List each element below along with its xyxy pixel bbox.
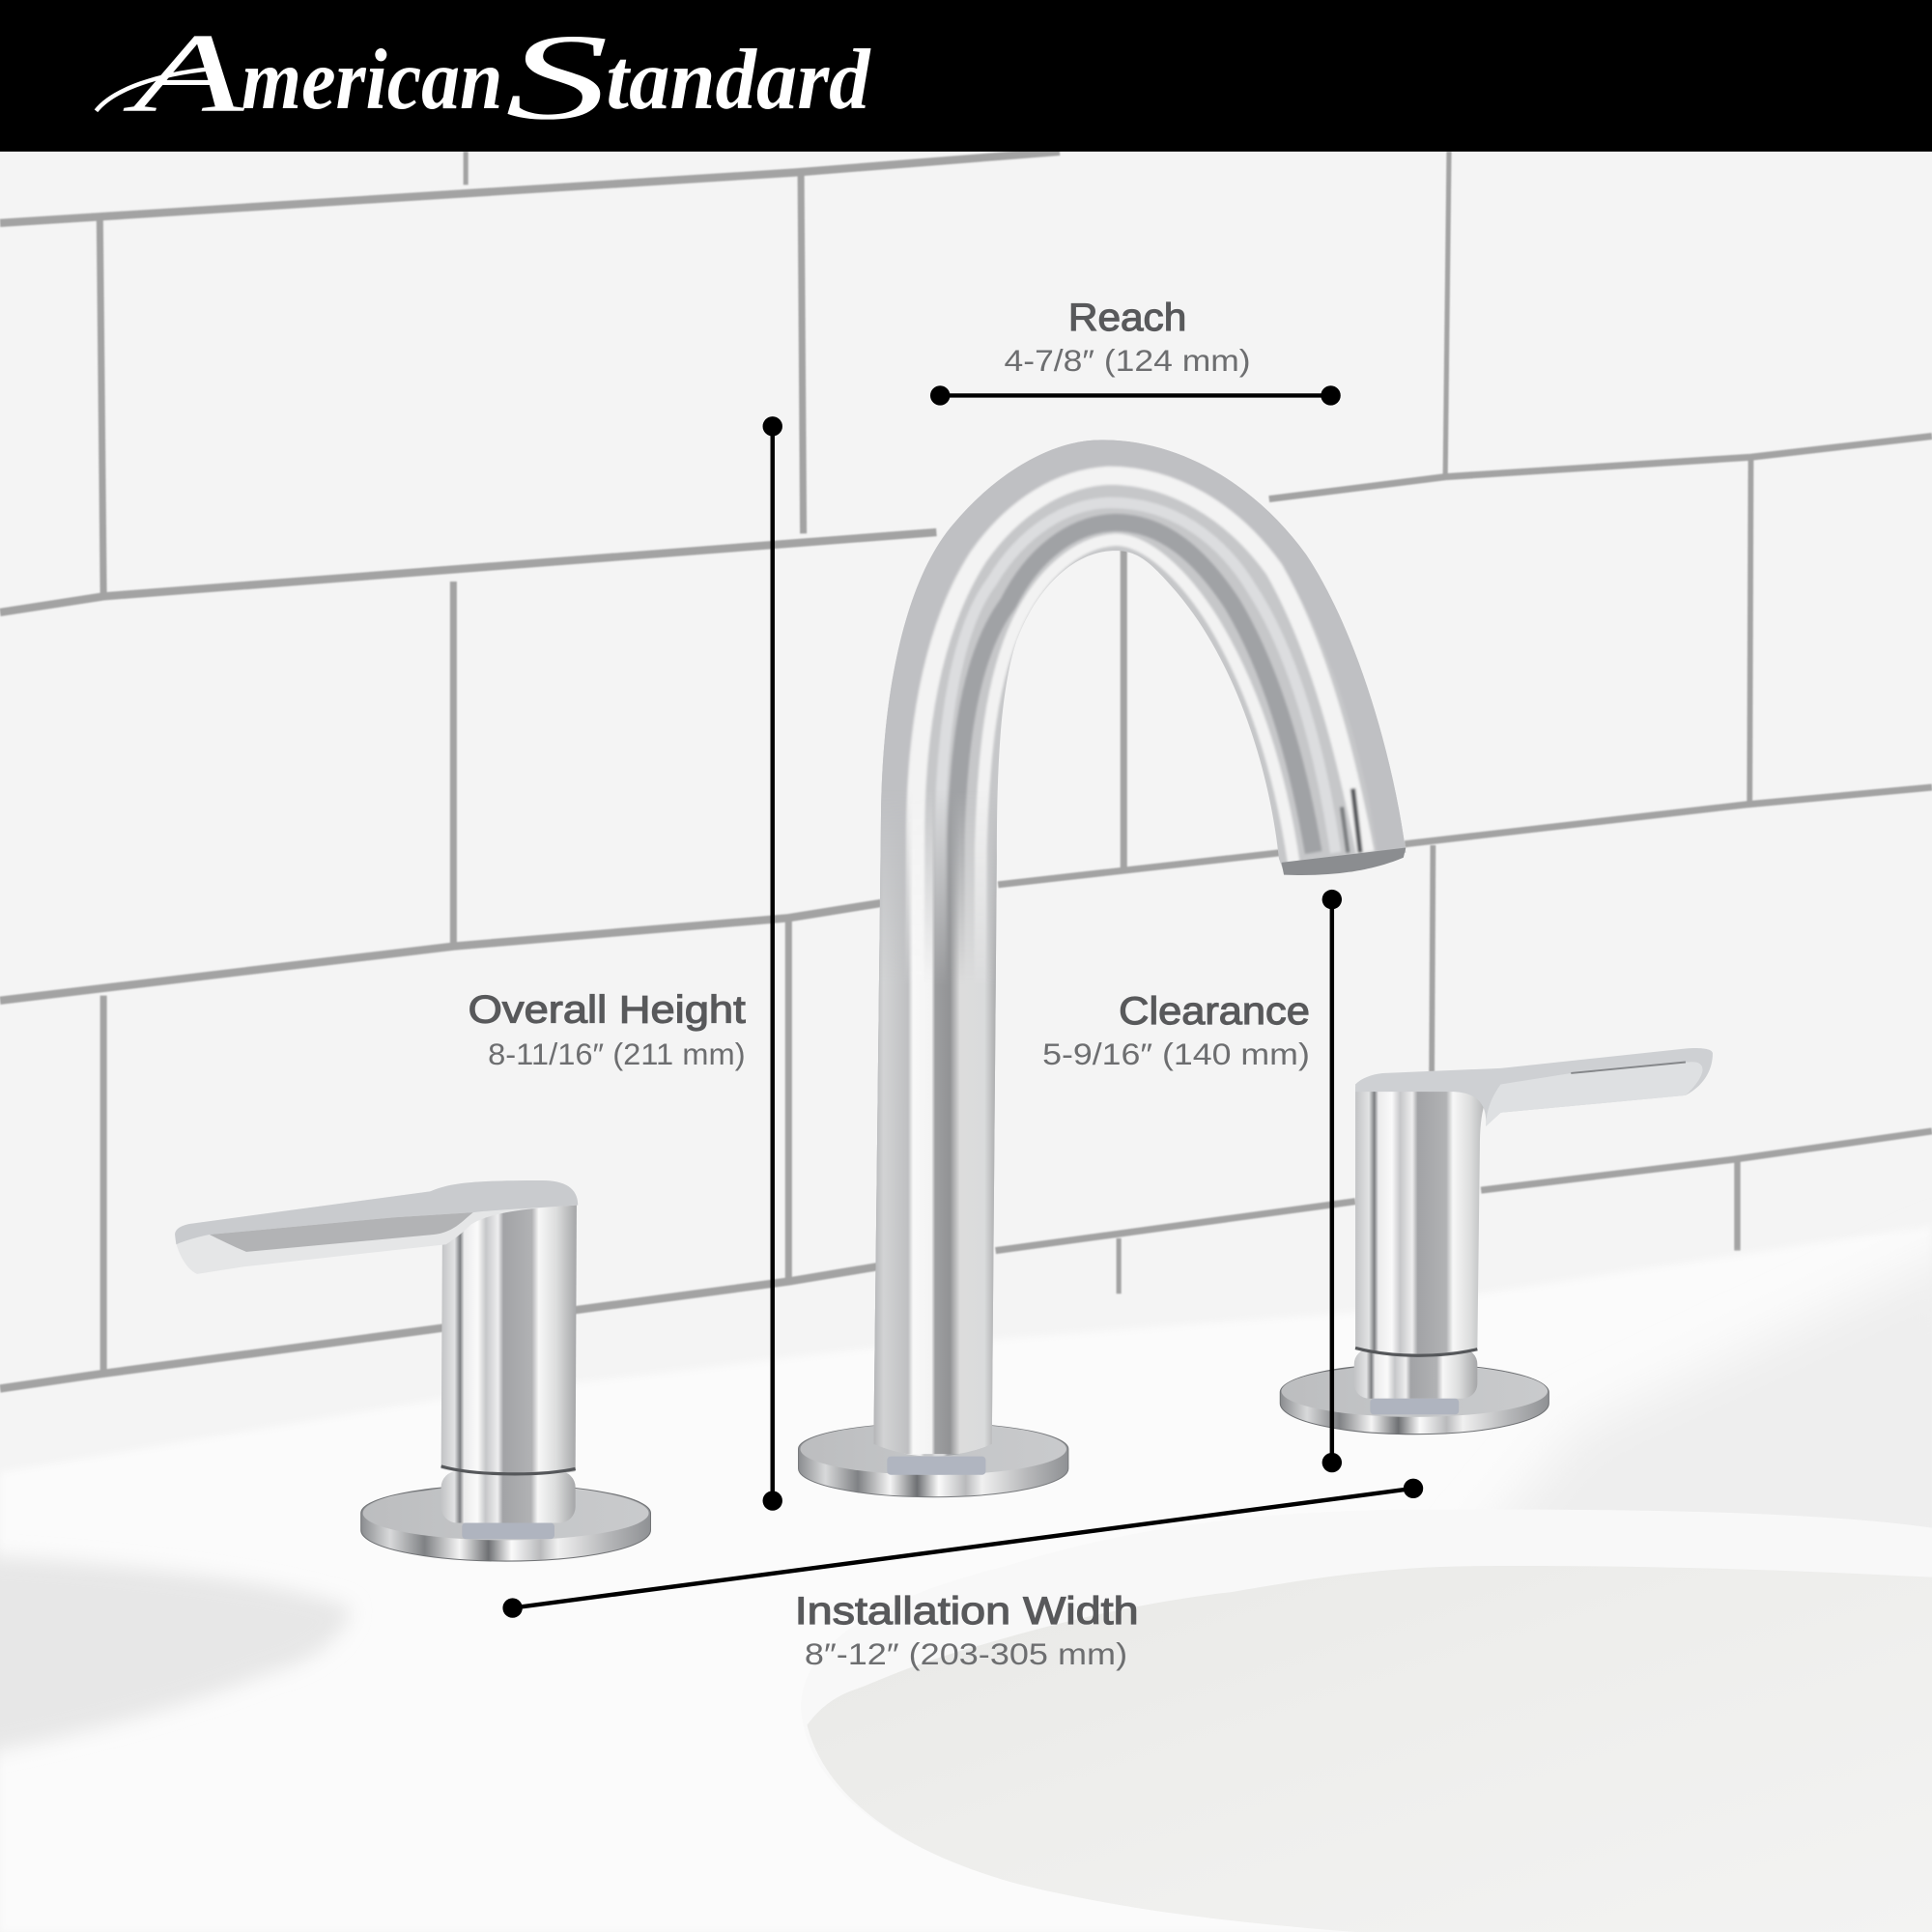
logo: American Standard: S	[505, 8, 609, 145]
label: installation width	[795, 1590, 1139, 1671]
label: overall height	[469, 989, 746, 1071]
spout stem stripes	[873, 788, 997, 1454]
dimension line: overall height	[763, 416, 782, 1511]
dimension line: reach	[930, 385, 1341, 406]
logo: American Standard	[96, 8, 871, 145]
label: clearance: 5-9/16″ (140 mm)	[1042, 1037, 1310, 1071]
faucet spout	[873, 440, 1406, 1466]
label: reach: Reach	[1068, 297, 1186, 339]
label: reach	[1005, 297, 1251, 378]
label: reach: 4-7/8″ (124 mm)	[1005, 343, 1251, 378]
label: installation width: Installation Width	[795, 1590, 1139, 1633]
left sink basin	[0, 1555, 352, 1757]
dimension line: installation width	[502, 1479, 1423, 1618]
center plate reflection	[887, 1457, 985, 1475]
right handle	[1280, 1048, 1713, 1435]
label: clearance: Clearance	[1119, 990, 1310, 1033]
tile grout lines	[0, 152, 1932, 1389]
logo: American Standard: A	[123, 11, 246, 136]
label: clearance	[1042, 990, 1310, 1071]
dimension line: clearance	[1322, 890, 1342, 1472]
counter shading right	[1454, 1244, 1932, 1577]
label: overall height: 8-11/16″ (211 mm)	[488, 1037, 746, 1071]
logo: American Standard: tandard	[607, 32, 871, 128]
right sink basin	[801, 1509, 1932, 1932]
label: installation width: 8″-12″ (203-305 mm)	[805, 1636, 1127, 1671]
label: overall height: Overall Height	[469, 989, 746, 1032]
logo: American Standard: merican	[242, 32, 502, 128]
header bar	[0, 0, 1932, 152]
faucet aerator	[1282, 848, 1406, 875]
countertop	[0, 1226, 1932, 1932]
left handle	[175, 1180, 650, 1561]
center base plate	[799, 1423, 1068, 1497]
